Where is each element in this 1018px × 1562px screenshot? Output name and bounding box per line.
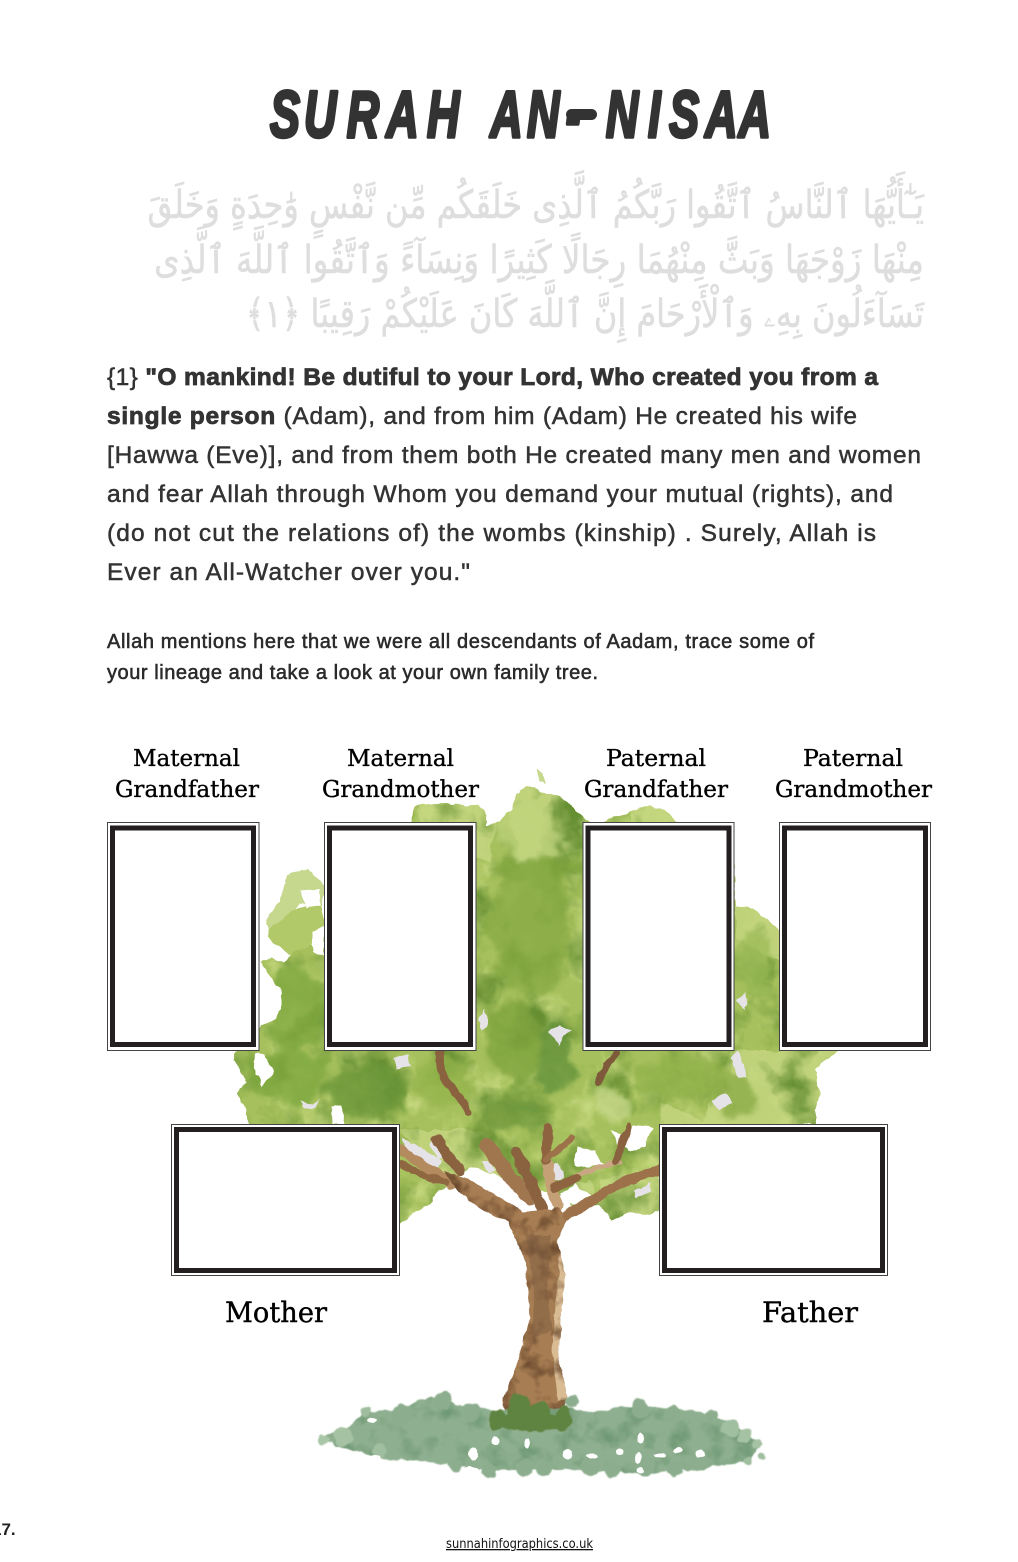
frame: paternal grandfather [583,822,734,1050]
label: father: Father [762,1296,859,1329]
label: paternal grandfather: Paternal [606,746,706,772]
label: maternal grandmother: Grandmother [322,777,479,803]
arabic verse: تَسَآءَلُونَ بِهِۦ وَٱلْأَرْحَامَ إِنَّ ٱللَّهَ كَانَ عَلَيْكُمْ رَقِيبًا ﴿١﴾ [246,279,924,343]
label: paternal grandmother: Grandmother [775,777,932,803]
label: paternal grandmother: Paternal [803,746,903,772]
grass patch at base of tree [310,1390,770,1480]
illustration: watercolour tree [225,765,865,1480]
frame: mother [172,1124,400,1276]
label: maternal grandfather [115,746,259,803]
frame: father [660,1124,888,1276]
website footer: sunnahinfographics.co.uk [446,1537,593,1552]
instruction text: Allah mentions here that we were all descendants of Aadam, trace some of [107,631,814,653]
verse translation: {1} "O mankind! Be dutiful to your Lord, Who created you from a [107,364,878,391]
arabic verse: مِنْهَا زَوْجَهَا وَبَثَّ مِنْهُمَا رِجَالًا كَثِيرًا وَنِسَآءً وَٱتَّقُوا ٱللَّهَ ٱلَّذِى [154,224,924,288]
label: maternal grandmother [322,746,479,803]
verse translation: (do not cut the relations of) the wombs (kinship) . Surely, Allah is [107,520,876,547]
frame: maternal grandmother [324,822,476,1050]
verse translation [107,364,921,586]
label: maternal grandfather: Maternal [133,746,240,772]
label: paternal grandmother [775,746,932,803]
frame: maternal grandfather [108,822,259,1050]
arabic verse: يَـٰٓأَيُّهَا ٱلنَّاسُ ٱتَّقُوا رَبَّكُمُ ٱلَّذِى خَلَقَكُم مِّن نَّفْسٍ وَٰحِدَةٍ وَخَلَقَ [148,170,924,239]
tree canopy [225,765,865,1235]
arabic verse [148,170,924,343]
label: paternal grandfather [584,746,728,803]
label: maternal grandmother: Maternal [347,746,454,772]
verse translation: single person (Adam), and from him (Adam) He created his wife [107,403,857,430]
verse translation: Ever an All-Watcher over you." [107,559,470,586]
title: SURAH AN-NISAA [270,77,771,151]
label: mother: Mother [225,1296,328,1329]
tree trunk and branches [400,1052,661,1425]
instruction text: your lineage and take a look at your own family tree. [107,662,598,684]
verse translation: [Hawwa (Eve)], and from them both He created many men and women [107,442,921,469]
verse translation: and fear Allah through Whom you demand your mutual (rights), and [107,481,893,508]
label: maternal grandfather: Grandfather [115,777,259,803]
label: paternal grandfather: Grandfather [584,777,728,803]
instruction text [107,631,814,684]
frame: paternal grandmother [780,822,930,1050]
